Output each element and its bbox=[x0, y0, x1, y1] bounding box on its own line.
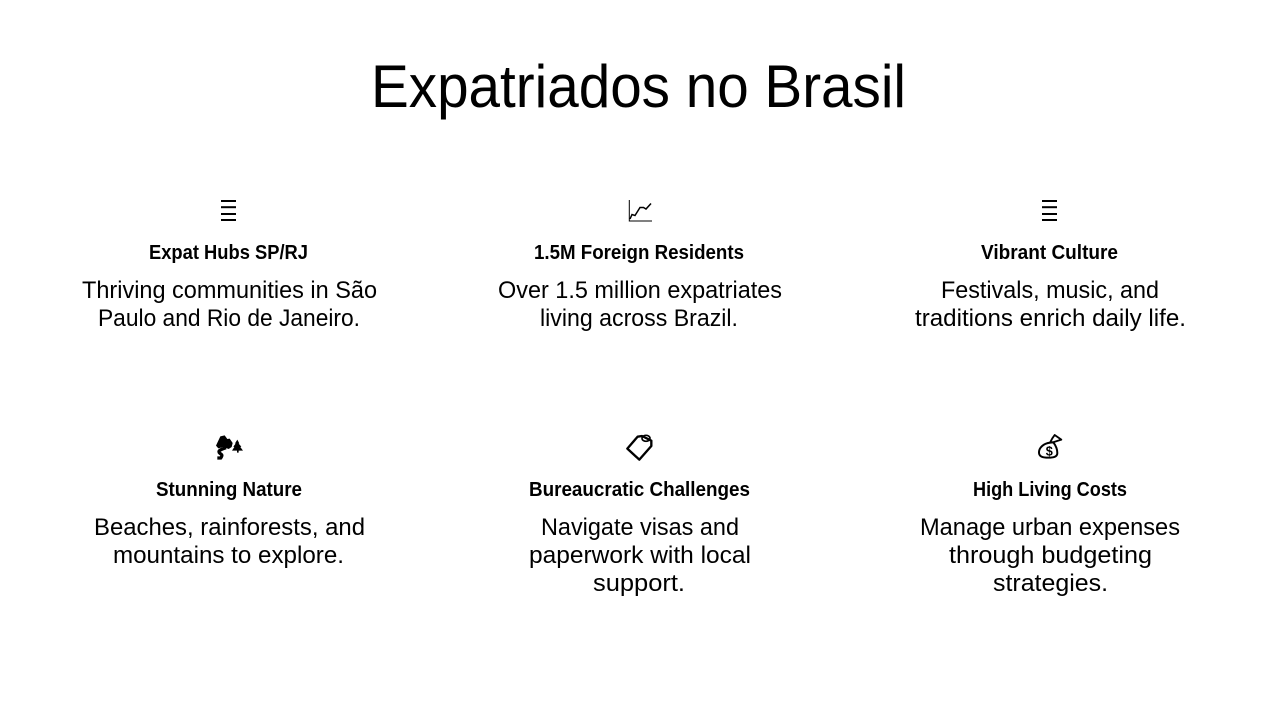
icon: money bag bbox=[1039, 435, 1061, 459]
text: High Living Costs description bbox=[920, 514, 1180, 597]
text: Expat Hubs description: Paulo and Rio de Janeiro. bbox=[98, 305, 360, 332]
heading: Bureaucratic Challenges: Bureaucratic Challenges bbox=[529, 479, 750, 501]
text: Vibrant Culture description: traditions enrich daily life. bbox=[915, 305, 1186, 332]
card: Expat Hubs bbox=[82, 200, 377, 332]
text: Bureaucratic Challenges description: support. bbox=[593, 570, 685, 597]
text: Bureaucratic Challenges description bbox=[529, 514, 751, 597]
text: Stunning Nature description: mountains to explore. bbox=[113, 542, 344, 569]
text: High Living Costs description: through budgeting bbox=[949, 542, 1152, 569]
title: Expatriados no Brasil bbox=[371, 53, 906, 120]
heading: Foreign Residents: 1.5M Foreign Residents bbox=[534, 242, 744, 264]
heading: Stunning Nature: Stunning Nature bbox=[156, 479, 302, 501]
text: Stunning Nature description: Beaches, rainforests, and bbox=[94, 514, 365, 541]
icon: list lines bbox=[1042, 200, 1057, 221]
icon: line chart bbox=[629, 200, 652, 221]
card: Bureaucratic Challenges bbox=[529, 435, 751, 597]
icon: list lines bbox=[221, 200, 236, 221]
icon: tag bbox=[627, 435, 651, 460]
text: Expat Hubs description: Thriving communities in São bbox=[82, 277, 377, 304]
card: Foreign Residents bbox=[498, 200, 782, 332]
text: Foreign Residents description: Over 1.5 million expatriates bbox=[498, 277, 782, 304]
text: Bureaucratic Challenges description: paperwork with local bbox=[529, 542, 751, 569]
icon: mountain, river and tree bbox=[216, 435, 243, 458]
card: Stunning Nature bbox=[94, 435, 365, 569]
text: High Living Costs description: strategies. bbox=[993, 570, 1108, 597]
text: Foreign Residents description: living across Brazil. bbox=[540, 305, 738, 332]
text: Stunning Nature description bbox=[94, 514, 365, 569]
heading: High Living Costs: High Living Costs bbox=[973, 479, 1127, 501]
text: Expat Hubs description bbox=[82, 277, 377, 332]
card: High Living Costs bbox=[920, 435, 1180, 597]
card: Vibrant Culture bbox=[915, 200, 1186, 332]
text: Vibrant Culture description bbox=[915, 277, 1186, 332]
text: Bureaucratic Challenges description: Navigate visas and bbox=[541, 514, 739, 541]
text: High Living Costs description: Manage urban expenses bbox=[920, 514, 1180, 541]
text: Foreign Residents description bbox=[498, 277, 782, 332]
icon: money bag: $ bbox=[1046, 445, 1053, 459]
text: Vibrant Culture description: Festivals, music, and bbox=[941, 277, 1159, 304]
heading: Vibrant Culture: Vibrant Culture bbox=[981, 242, 1118, 264]
heading: Expat Hubs: Expat Hubs SP/RJ bbox=[149, 242, 308, 264]
